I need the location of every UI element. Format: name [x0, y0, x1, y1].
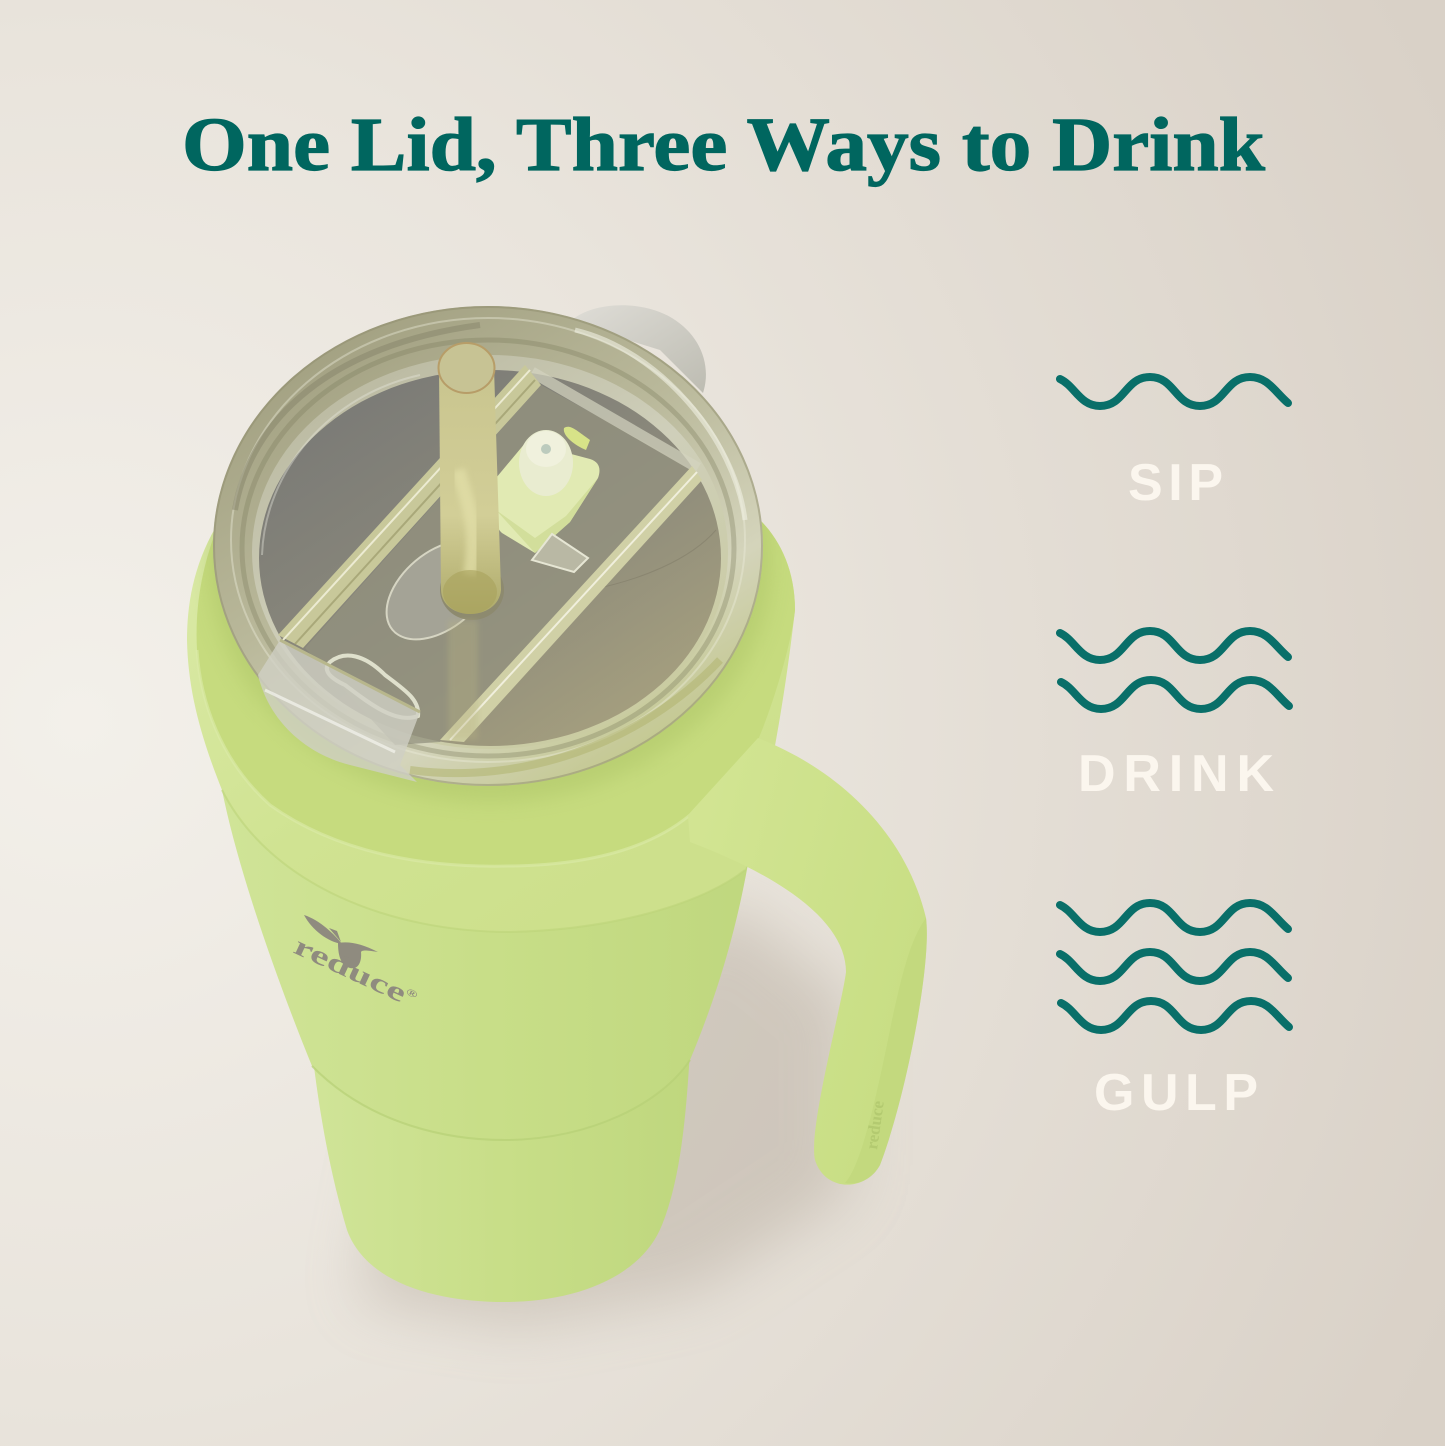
slider top band — [532, 372, 698, 468]
lid outer rim — [213, 306, 763, 786]
slider track floor — [305, 385, 692, 745]
sip flap — [570, 305, 706, 393]
logo: reduce: ® — [404, 987, 420, 1002]
tumbler illustration — [187, 305, 927, 1302]
straw hole — [368, 521, 512, 659]
upper slider bar — [278, 365, 541, 648]
inner cup markings — [590, 530, 716, 590]
handle embossed brand: reduce — [862, 1099, 888, 1151]
vent opening — [327, 656, 418, 718]
handle — [688, 738, 927, 1185]
lid rim glare — [410, 660, 720, 773]
straw — [438, 343, 501, 614]
lower tumbler base — [312, 1050, 690, 1302]
gulp: three wave icon and label — [1060, 903, 1289, 1122]
title: One Lid, Three Ways to Drink — [182, 103, 1266, 187]
lower slider bar — [440, 466, 702, 742]
label: GULP: GULP — [1094, 1064, 1258, 1122]
logo: reduce: reduce — [289, 930, 372, 990]
collar flare — [187, 520, 795, 932]
logo: reduce — [289, 915, 423, 1014]
collar upper band — [197, 520, 795, 866]
sip: one wave icon and label — [1060, 377, 1288, 512]
tumbler shadow — [360, 900, 850, 1325]
icon: single wave — [1060, 377, 1288, 406]
icon: double wave — [1060, 631, 1289, 709]
drink: two wave icon and label — [1060, 631, 1289, 803]
label: SIP: SIP — [1128, 454, 1223, 512]
upper tumbler body — [215, 740, 760, 1140]
lid inner cup — [259, 370, 721, 746]
bottom lid tab — [258, 640, 420, 782]
rear straw reflection — [448, 620, 478, 740]
label: DRINK: DRINK — [1078, 745, 1274, 803]
lid — [213, 305, 763, 786]
icon: triple wave — [1060, 903, 1289, 1030]
clear clip — [532, 534, 588, 572]
stopper — [496, 427, 599, 553]
